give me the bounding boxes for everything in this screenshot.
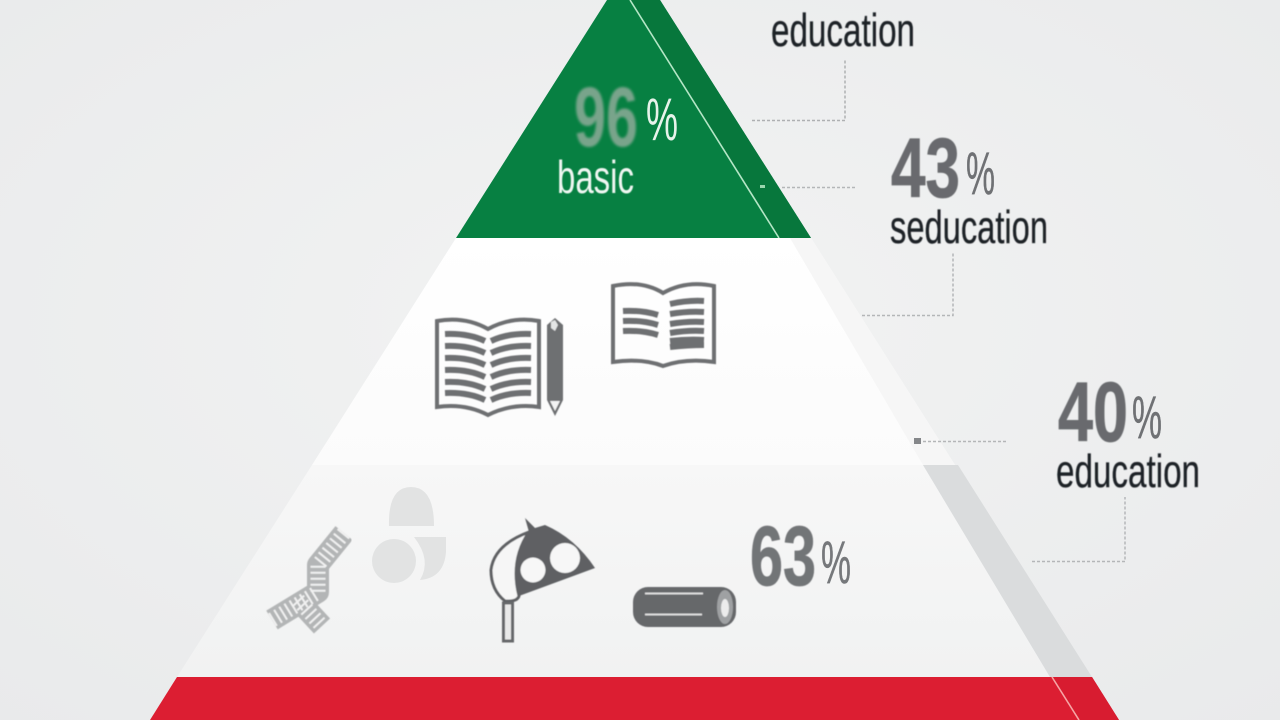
value: 43% seducation: seducation bbox=[890, 201, 1048, 253]
icon: textured zigzag bbox=[272, 533, 344, 626]
value: 40% education bbox=[1056, 365, 1200, 497]
value: 43% seducation bbox=[890, 121, 1048, 253]
connector: seducation bbox=[862, 253, 953, 316]
value: 63%: % bbox=[821, 529, 851, 596]
value: 96% basic: basic bbox=[557, 151, 634, 203]
value: 43% seducation: % bbox=[966, 140, 995, 207]
value: 96% basic bbox=[557, 70, 678, 203]
connector: second tier bbox=[914, 438, 1006, 444]
value: 63%: 63 bbox=[750, 509, 816, 603]
icon: lamp bbox=[491, 518, 595, 641]
icon: open book with lines bbox=[437, 320, 539, 415]
value: 43% seducation: 43 bbox=[891, 121, 960, 215]
icon: cylinder bbox=[633, 587, 736, 627]
icon: open book small bbox=[613, 284, 714, 366]
tier: green top bbox=[456, 0, 811, 238]
tier: light third bbox=[177, 465, 1092, 677]
value: 96% basic: 96 bbox=[574, 70, 638, 164]
top label: education: education bbox=[771, 4, 915, 56]
value: 40% education: % bbox=[1132, 384, 1162, 451]
icon: pencil bbox=[547, 318, 563, 416]
connector: green tier bbox=[760, 185, 856, 188]
value: 96% basic: % bbox=[646, 86, 678, 153]
icon: egg and circles bbox=[372, 487, 446, 583]
value: 40% education: education bbox=[1056, 445, 1200, 497]
pyramid bbox=[150, 0, 1119, 720]
connector: top label bbox=[752, 60, 845, 120]
value: 40% education: 40 bbox=[1058, 365, 1128, 459]
tier: white second bbox=[312, 238, 955, 465]
connector: education bbox=[1032, 497, 1125, 562]
tier: red base bbox=[150, 677, 1119, 720]
